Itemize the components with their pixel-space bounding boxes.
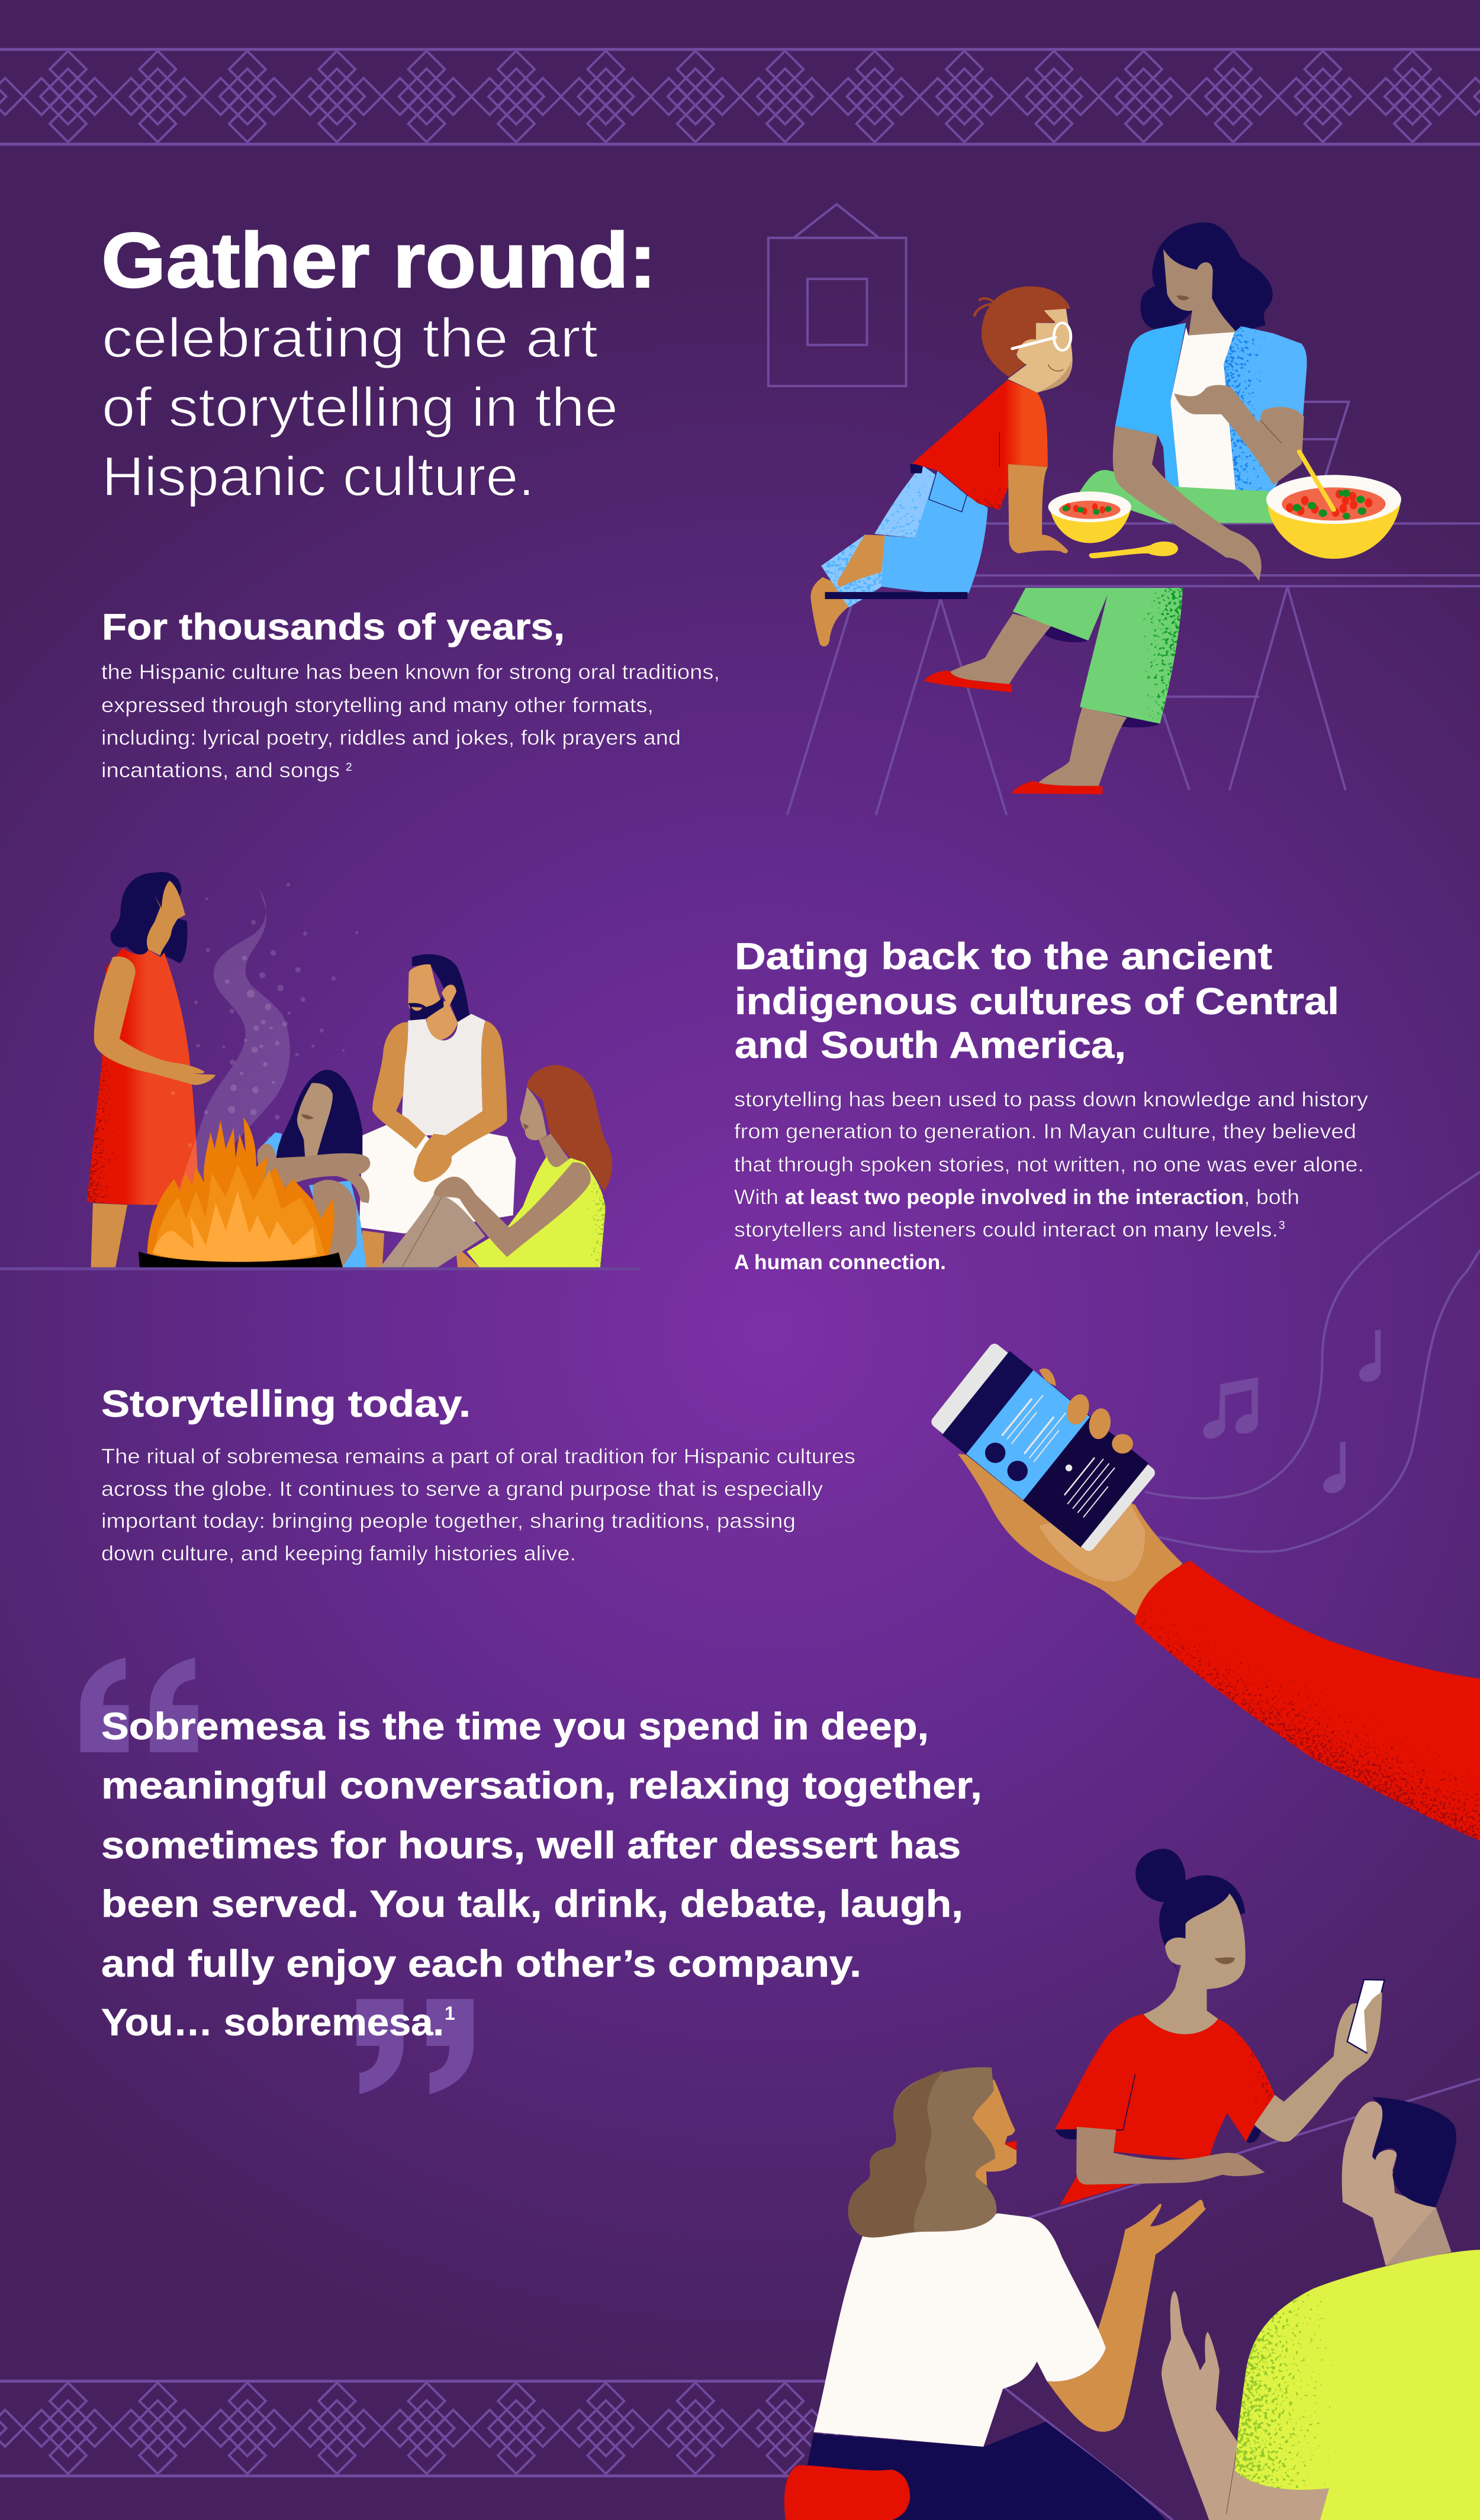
quote text: sobremesa: Sobremesa is the time you spend in deep, [101, 1705, 929, 1747]
text block: storytelling today [101, 1383, 855, 1565]
title: Gather round: [101, 217, 657, 304]
text block: for thousands of years: 2 [346, 761, 352, 774]
text block: dating back: storytellers and listeners could interact on many levels. [734, 1218, 1278, 1241]
text block: for thousands of years [101, 607, 720, 782]
quote text: sobremesa: and fully enjoy each other’s company. [101, 1942, 861, 1985]
text block: dating back: from generation to generation. In Mayan culture, they believed [734, 1120, 1356, 1143]
text block: dating back: A human connection. [734, 1251, 946, 1274]
text block: dating back [734, 936, 1369, 1274]
text block: dating back: With [734, 1186, 778, 1209]
woman: upper body [1079, 223, 1307, 581]
title: of storytelling in the [102, 376, 618, 438]
table edge lines [1003, 2079, 1480, 2520]
text block: for thousands of years: expressed through storytelling and many other formats, [101, 694, 654, 717]
seated man [359, 954, 516, 1267]
boy leaning on table [810, 287, 1073, 646]
large soup bowl [1266, 452, 1401, 559]
small soup bowl [1048, 491, 1131, 543]
woman: legs and shoes [924, 588, 1183, 794]
top ornamental knot band [0, 48, 1480, 146]
hand [958, 1369, 1182, 1615]
sound wave curves [1145, 1172, 1480, 1552]
standing storyteller [87, 872, 215, 1267]
title [101, 217, 657, 507]
red sleeve [1134, 1560, 1480, 1841]
text block: storytelling today: down culture, and keeping family histories alive. [101, 1542, 576, 1565]
text block: dating back: Dating back to the ancient [735, 936, 1272, 977]
seated woman with red hair [380, 1065, 612, 1267]
text block: dating back: storytelling has been used to pass down knowledge and history [734, 1088, 1369, 1111]
text block: for thousands of years: the Hispanic culture has been known for strong oral traditions, [101, 661, 720, 684]
text block: for thousands of years: For thousands of years, [102, 607, 565, 648]
woman seen from behind, white shirt [784, 2067, 1206, 2520]
quote text: sobremesa [101, 1705, 982, 2043]
text block: storytelling today: The ritual of sobremesa remains a part of oral tradition for Hispanic cultures [101, 1445, 855, 1468]
illustration: friends chatting at table [784, 1849, 1480, 2520]
wall picture frame [768, 204, 906, 386]
text block: for thousands of years: incantations, and songs [101, 759, 340, 782]
text block: dating back: , both [1244, 1186, 1299, 1209]
illustration: storytelling around the fire [0, 872, 640, 1270]
text block: dating back: and South America, [735, 1025, 1126, 1066]
spoon [1089, 542, 1178, 558]
quote text: sobremesa: been served. You talk, drink, debate, laugh, [101, 1882, 963, 1925]
text block: storytelling today: important today: bringing people together, sharing traditions, passing [101, 1510, 796, 1533]
bottom ornamental knot band [0, 2380, 858, 2477]
quote text: sobremesa: meaningful conversation, relaxing together, [101, 1764, 982, 1807]
text block: dating back: at least two people involved in the interaction [785, 1186, 1244, 1209]
smoke [171, 883, 359, 1191]
text block: dating back: that through spoken stories, not written, no one was ever alone. [734, 1153, 1364, 1176]
table and chairs outlines [787, 402, 1480, 815]
text block: dating back: indigenous cultures of Central [735, 981, 1339, 1022]
seated woman with dark hair [257, 1070, 370, 1267]
illustration: hand holding phone with music [937, 1172, 1480, 1841]
quote text: sobremesa: sometimes for hours, well after dessert has [101, 1824, 961, 1866]
music notes [1203, 1330, 1381, 1493]
ground line [0, 1267, 640, 1270]
quote text: sobremesa: 1 [445, 2003, 455, 2024]
text block: storytelling today: across the globe. It continues to serve a grand purpose that is especially [101, 1478, 823, 1501]
woman with hair bun and phone [1055, 1849, 1385, 2206]
text block: storytelling today: Storytelling today. [101, 1383, 471, 1425]
phone [937, 1349, 1149, 1547]
title: Hispanic culture. [102, 445, 535, 507]
campfire [139, 1117, 343, 1267]
quote text: sobremesa: You… sobremesa. [101, 2001, 444, 2043]
quote marks [81, 1658, 474, 2094]
illustration: family at dinner table [768, 204, 1480, 815]
text block: for thousands of years: including: lyrical poetry, riddles and jokes, folk prayers and [101, 726, 681, 749]
text block: dating back: 3 [1279, 1219, 1285, 1232]
title: celebrating the art [102, 307, 598, 369]
man in lime shirt [1162, 2097, 1480, 2520]
